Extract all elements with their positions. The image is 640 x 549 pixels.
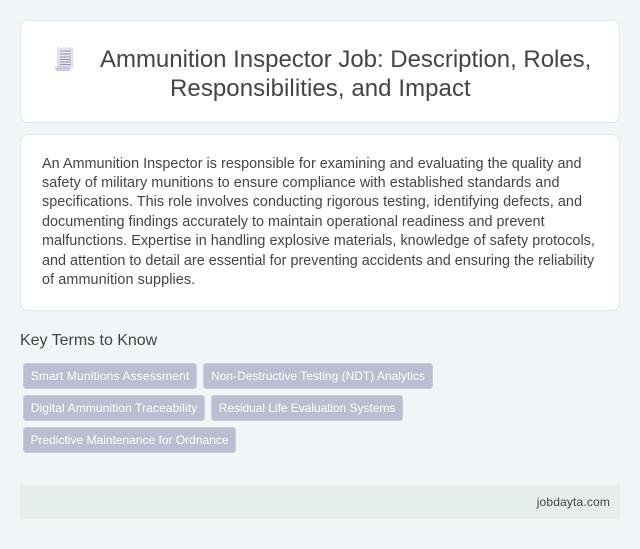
text block: description: safety of military munitions to ensure compliance with established standards and xyxy=(42,175,560,191)
title: Responsibilities, and Impact xyxy=(170,75,471,102)
tag: predictive maintenance: Predictive Maintenance for Ordnance xyxy=(30,433,229,447)
tag: NDT analytics: Non-Destructive Testing (NDT) Analytics xyxy=(211,369,425,383)
text block: description: of ammunition supplies. xyxy=(42,272,195,288)
icon: document scroll xyxy=(55,47,74,71)
heading: key terms: Key Terms to Know xyxy=(20,332,157,349)
panel: key term tags xyxy=(23,363,433,453)
tag: smart munitions xyxy=(23,363,197,389)
tag: NDT analytics xyxy=(203,363,433,389)
footer text: jobdayta.com xyxy=(537,495,610,509)
tag: predictive maintenance xyxy=(23,427,236,453)
title: Ammunition Inspector Job: Description, Roles, xyxy=(100,46,591,73)
tag: residual life: Residual Life Evaluation Systems xyxy=(219,401,395,415)
text block: description: and attention to detail are essential for preventing accidents and ensuring the reliability xyxy=(42,252,594,268)
title xyxy=(100,46,591,102)
text block: description xyxy=(42,156,595,288)
text block: description: specifications. This role involves conducting rigorous testing, identifying defects, and xyxy=(42,194,582,210)
tag: residual life xyxy=(211,395,403,421)
text block: description: malfunctions. Expertise in handling explosive materials, knowledge of safety protocols, xyxy=(42,233,595,249)
tag: digital traceability: Digital Ammunition Traceability xyxy=(31,401,197,415)
text block: description: An Ammunition Inspector is responsible for examining and evaluating the quality and xyxy=(42,156,582,172)
tag: smart munitions: Smart Munitions Assessment xyxy=(31,369,189,383)
panel: description card xyxy=(20,134,620,311)
tag: digital traceability xyxy=(23,395,205,421)
text block: description: documenting findings accurately to maintain operational readiness and prevent xyxy=(42,214,545,230)
footer bar xyxy=(20,485,620,519)
panel: header card xyxy=(20,20,620,123)
